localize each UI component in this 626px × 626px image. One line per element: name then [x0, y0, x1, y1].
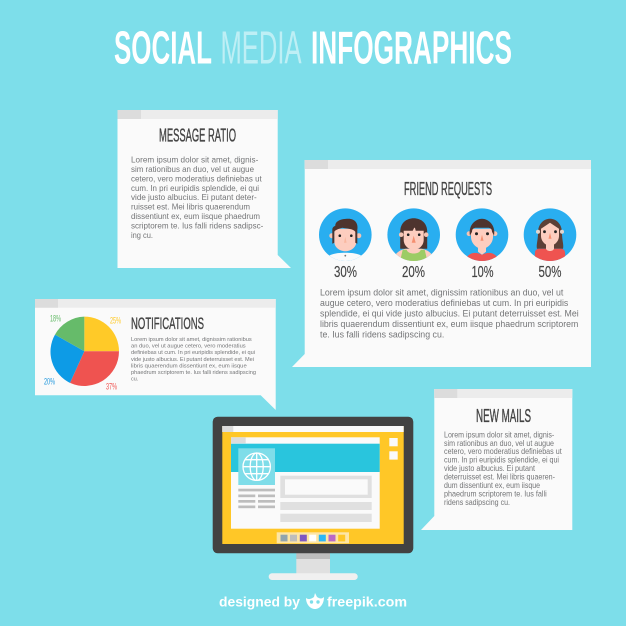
avatar: man with white shirt: [319, 208, 372, 265]
percent labels: [334, 264, 562, 281]
heading: message ratio: MESSAGE RATIO: [159, 126, 236, 146]
text block: message ratio: dissentiunt ex, eum iisque phaedrum: [131, 211, 260, 221]
pie labels: 25%: [110, 316, 121, 326]
text block: notifications: Lorem ipsum dolor sit amet, dignissim rationibus: [131, 337, 252, 343]
text block: notifications: cu.: [131, 377, 139, 383]
footer credit: designed by: [219, 594, 300, 610]
title: MEDIA: [220, 22, 302, 74]
text block: message ratio: vide justo albucius. Ei putant deter-: [131, 192, 257, 202]
heading: notifications: NOTIFICATIONS: [131, 314, 204, 333]
text block: notifications: vide justo albucius. Ei putant deterruisset est. Mei: [131, 357, 254, 363]
percent labels: 10%: [472, 264, 494, 281]
percent labels: 20%: [402, 264, 425, 281]
text block: message ratio: scriptorem te. Ius falli ridens sadipsc-: [131, 220, 263, 230]
text block: notifications: libris quaerendum dissentiunt ex, eum iisque: [131, 363, 247, 369]
footer credit: [219, 593, 407, 610]
text block: message ratio: sim rationibus an duo, vel ut augue: [131, 164, 254, 174]
title: [114, 22, 512, 74]
text block: message ratio: cum. In pri euripidis splendide, ei qui: [131, 183, 259, 193]
text block: friend requests: te. Ius falli ridens sadipscing cu.: [320, 329, 444, 339]
avatar: woman with red top: [524, 208, 576, 265]
text block: notifications: phaedrum scriptorem te. Ius falli ridens sadipscing: [131, 370, 256, 376]
text block: message ratio: ruisset est. Mei libris quaerendum: [131, 202, 250, 212]
text block: new mails: ridens sadipscing cu.: [444, 497, 510, 507]
panel: notifications: [35, 299, 276, 410]
panel: friend requests: [292, 160, 591, 367]
panel: message ratio: [118, 110, 291, 268]
text block: new mails: dum dissentiunt ex, eum iisque: [444, 480, 540, 490]
heading: friend requests: FRIEND REQUESTS: [404, 179, 492, 199]
text block: message ratio: Lorem ipsum dolor sit amet, dignis-: [131, 154, 258, 164]
text block: message ratio: [131, 154, 263, 240]
icon: globe: [238, 448, 275, 485]
text block: new mails: [444, 429, 562, 507]
percent labels: 30%: [334, 264, 357, 281]
icon dock: [277, 532, 349, 543]
percent labels: 50%: [538, 264, 562, 281]
pie labels: 20%: [44, 376, 55, 386]
text block: friend requests: libris quaerendum dissentiunt ex, eum iisque phaedrum scriptorem: [320, 319, 578, 329]
text block: new mails: sim rationibus an duo, vel ut augue: [444, 438, 554, 448]
text block: notifications: [131, 337, 256, 383]
text block: notifications: an duo, vel ut augue cetero, vero moderatius: [131, 344, 246, 350]
text block: message ratio: cetero, vero moderatius definiebas ut: [131, 173, 262, 183]
title: SOCIAL: [114, 22, 212, 74]
panel: new mails: [421, 389, 572, 530]
pie labels: [44, 314, 121, 392]
illustration: desktop monitor: [213, 417, 413, 580]
avatar: man with red shirt: [456, 208, 508, 265]
text block: new mails: vide justo albucius. Ei putant: [444, 463, 535, 473]
text block: friend requests: splendide, ei qui vide justo albucius. Ei putant deterruisset est. Mei: [320, 308, 579, 318]
text block: new mails: deterruisset est. Mei libris quaeren-: [444, 472, 555, 482]
pie chart: [50, 317, 119, 386]
text block: new mails: cetero, vero moderatius definiebas ut: [444, 446, 562, 456]
heading: new mails: NEW MAILS: [476, 406, 531, 426]
text block: new mails: cum. In pri euripidis splendide, ei qui: [444, 455, 559, 465]
pie labels: 37%: [106, 382, 117, 392]
text block: friend requests: augue cetero, vero moderatius definiebas ut cum. In pri euripidis: [320, 298, 569, 308]
avatar: woman with green top: [387, 208, 440, 265]
text block: notifications: definiebas ut cum. In pri euripidis splendide, ei qui: [131, 350, 255, 356]
text block: new mails: Lorem ipsum dolor sit amet, dignis-: [444, 429, 554, 439]
icon: freepik logo: [306, 593, 324, 609]
footer credit: freepik.com: [327, 594, 407, 610]
text block: new mails: phaedrum scriptorem te. Ius falli: [444, 488, 547, 498]
text block: friend requests: [320, 288, 579, 339]
pie labels: 18%: [50, 314, 61, 324]
text block: message ratio: ing cu.: [131, 230, 153, 240]
text block: friend requests: Lorem ipsum dolor sit amet, dignissim rationibus an duo, vel ut: [320, 288, 564, 298]
